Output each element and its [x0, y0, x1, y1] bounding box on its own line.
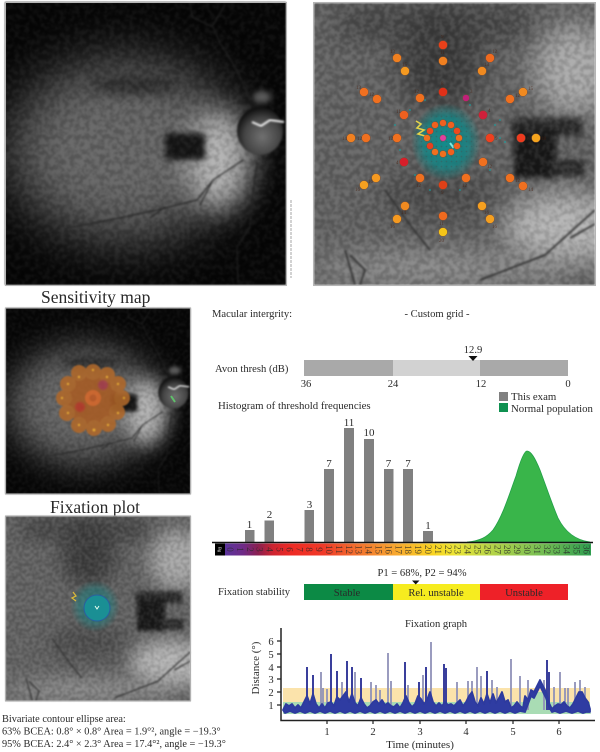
colour scale: 7 — [294, 547, 304, 552]
colour scale: 26 — [482, 545, 492, 554]
stimulus point values: 14 — [342, 137, 348, 142]
stimulus point values: 12 — [416, 184, 422, 189]
sensitivity overlay — [56, 364, 130, 436]
colour scale: 4 — [265, 547, 275, 552]
bar values — [247, 417, 431, 532]
bar values: 10 — [364, 427, 375, 439]
stimulus point values — [342, 35, 546, 244]
bar values: 1 — [247, 519, 252, 531]
colour scale: 12 — [344, 545, 354, 554]
x axis numbers — [324, 727, 562, 738]
stimulus point values: 9 — [495, 137, 498, 142]
y axis numbers: 3 — [268, 675, 274, 686]
stimulus point values: 16 — [368, 180, 374, 185]
colour scale: 15 — [374, 545, 384, 554]
stimulus point values: 4 — [488, 109, 491, 114]
avon threshold scale — [215, 345, 571, 390]
stimulus point values: 15 — [528, 87, 534, 92]
fixation cloud — [394, 99, 506, 191]
fixation stability scale: Unstable — [505, 588, 543, 599]
axes — [281, 628, 595, 720]
retinal image: infrared fundus — [5, 2, 291, 286]
bars — [245, 428, 433, 542]
legend: This exam — [511, 391, 557, 403]
y axis numbers: 1 — [268, 701, 274, 712]
colour scale: 5 — [274, 547, 284, 552]
bar values: 1 — [425, 520, 431, 532]
stimulus point values: 9 — [441, 191, 444, 196]
avon threshold scale: 12.9 — [464, 345, 482, 356]
colour scale: 17 — [393, 545, 403, 554]
stimulus point values: 12 — [388, 137, 394, 142]
colour scale: 33 — [552, 545, 562, 554]
fixation ellipses — [70, 580, 120, 632]
y axis numbers: 4 — [268, 663, 274, 674]
fixation stability scale — [218, 568, 568, 600]
colour scale: 24 — [463, 545, 473, 554]
stimulus point values: 15 — [402, 63, 408, 68]
colour scale: 34 — [562, 545, 572, 554]
stimulus point values: 18 — [541, 137, 546, 142]
stimulus point values: 12 — [492, 50, 498, 55]
stimulus point values: 13 — [390, 50, 396, 55]
stimulus point values: 14 — [528, 188, 534, 193]
colour scale: 8 — [304, 547, 314, 552]
fixation stability scale: Stable — [334, 588, 361, 599]
stability bands — [283, 688, 590, 702]
marker — [468, 356, 478, 361]
x axis title: Time (minutes) — [386, 739, 454, 751]
colour scale: 16 — [383, 545, 393, 554]
colour scale: 23 — [453, 545, 463, 554]
colour scale: 29 — [512, 545, 522, 554]
stimulus point values: 10 — [526, 137, 532, 142]
bar values: 11 — [344, 417, 354, 429]
stimulus point values: 11 — [439, 222, 444, 227]
colour scale: 0 — [225, 547, 235, 552]
colour scale: 9 — [314, 547, 324, 552]
colour scale: 31 — [532, 545, 542, 554]
heading: histogram of threshold frequencies: Histogram of threshold frequencies — [218, 400, 371, 412]
stimulus point values: 20 — [439, 239, 444, 244]
legend: Normal population — [511, 403, 593, 415]
bar values: 3 — [307, 499, 313, 511]
stimulus point values: 16 — [355, 188, 360, 193]
heading: custom grid: - Custom grid - — [404, 309, 470, 320]
retinal image: microperimetry grid with fixation cloud — [310, 2, 600, 286]
avon threshold scale: Avon thresh (dB) — [215, 364, 289, 375]
heading: fixation graph: Fixation graph — [405, 619, 468, 630]
x axis numbers: 2 — [370, 727, 376, 738]
colour scale: 2 — [245, 547, 255, 552]
fixation line graph — [250, 628, 595, 751]
colour scale: 25 — [472, 545, 482, 554]
stimulus point values: 12 — [487, 165, 492, 170]
x axis numbers: 3 — [417, 727, 423, 738]
heading: sensitivity map: Sensitivity map — [41, 287, 151, 307]
stimulus point values: 14 — [401, 211, 406, 216]
colour scale: 28 — [502, 545, 512, 554]
fixation plot image — [3, 516, 212, 701]
stimulus point values: 16 — [492, 225, 498, 230]
x axis numbers: 1 — [324, 727, 330, 738]
y axis numbers — [268, 637, 274, 712]
y axis numbers: 5 — [268, 650, 274, 661]
colour scale: 6 — [284, 547, 294, 552]
text block: bivariate contour ellipse area: 95% BCEA: 2.4° × 2.3° Area = 17.4°², angle = −19.3° — [2, 739, 226, 750]
avon threshold scale: 12 — [476, 379, 486, 390]
colour scale: 13 — [354, 545, 364, 554]
colour scale: 35 — [572, 545, 582, 554]
stimulus point values: 13 — [356, 86, 362, 91]
y axis title: Distance (°) — [250, 641, 262, 694]
colour scale: 32 — [542, 545, 552, 554]
histogram chart — [212, 417, 593, 556]
bar values: 7 — [405, 458, 411, 470]
stimulus point values: 12 — [357, 137, 362, 142]
heading: macular integrity: Macular intergrity: — [212, 309, 292, 320]
x axis numbers: 4 — [463, 727, 469, 738]
stimulus point values: 12 — [515, 179, 520, 184]
fixation stability scale: P1 = 68%, P2 = 94% — [377, 568, 467, 579]
colour scale: 20 — [423, 545, 433, 554]
fixation stability scale: Rel. unstable — [408, 588, 464, 599]
stimulus point values: 8 — [441, 82, 444, 87]
fixation stability scale: Fixation stability — [218, 587, 291, 598]
normal population curve — [467, 451, 590, 542]
colour scale: 3 — [255, 547, 265, 552]
stimulus point values: 11 — [440, 51, 445, 56]
colour scale: 11 — [334, 545, 344, 554]
x axis numbers: 5 — [510, 727, 516, 738]
stimulus point values: 16 — [484, 211, 490, 216]
colour scale: 21 — [433, 545, 443, 554]
colour scale: 18 — [403, 545, 413, 554]
stimulus point values: 16 — [390, 225, 396, 230]
text block: bivariate contour ellipse area: Bivariate contour ellipse area: — [2, 714, 126, 725]
y axis numbers: 6 — [268, 637, 274, 648]
colour scale: 19 — [413, 545, 423, 554]
avon threshold scale: 36 — [301, 379, 311, 390]
colour scale: 27 — [492, 545, 502, 554]
avon threshold scale: 0 — [565, 379, 571, 390]
colour scale: 1 — [235, 547, 245, 552]
axis line — [212, 542, 593, 544]
bar values: 7 — [386, 458, 392, 470]
stimulus point values: 11 — [396, 110, 401, 115]
marker — [412, 580, 420, 584]
stimulus point values: 4 — [396, 161, 399, 166]
legend — [499, 391, 593, 415]
colour scale — [215, 544, 591, 556]
bar values: 7 — [326, 458, 332, 470]
colour scale: 10 — [324, 545, 334, 554]
stimulus point values: 12 — [462, 184, 468, 189]
x axis numbers: 6 — [556, 727, 562, 738]
stimulus point values: 12 — [515, 94, 520, 99]
stimulus point values: 12 — [369, 93, 374, 98]
heading: fixation plot: Fixation plot — [50, 497, 140, 517]
text block: bivariate contour ellipse area — [2, 714, 226, 750]
bar values: 2 — [267, 509, 272, 521]
colour scale: Bg — [218, 547, 222, 553]
sensitivity map image — [6, 308, 190, 494]
stimulus point values: 12 — [414, 90, 420, 95]
colour scale: 30 — [522, 545, 532, 554]
y axis numbers: 2 — [268, 688, 274, 699]
light spikes — [321, 642, 585, 710]
text block: bivariate contour ellipse area: 63% BCEA: 0.8° × 0.8° Area = 1.9°², angle = −19.3° — [2, 726, 221, 738]
colour scale: 14 — [364, 545, 374, 554]
colour scale: 36 — [581, 545, 591, 554]
stimulus point values: 13 — [484, 63, 490, 68]
stimulus points — [347, 41, 540, 236]
avon threshold scale: 24 — [388, 379, 399, 390]
stimulus point values: 3 — [470, 90, 473, 95]
stimulus point values: 9 — [441, 35, 444, 40]
fixation trace — [283, 654, 590, 713]
colour scale: 22 — [443, 545, 453, 554]
